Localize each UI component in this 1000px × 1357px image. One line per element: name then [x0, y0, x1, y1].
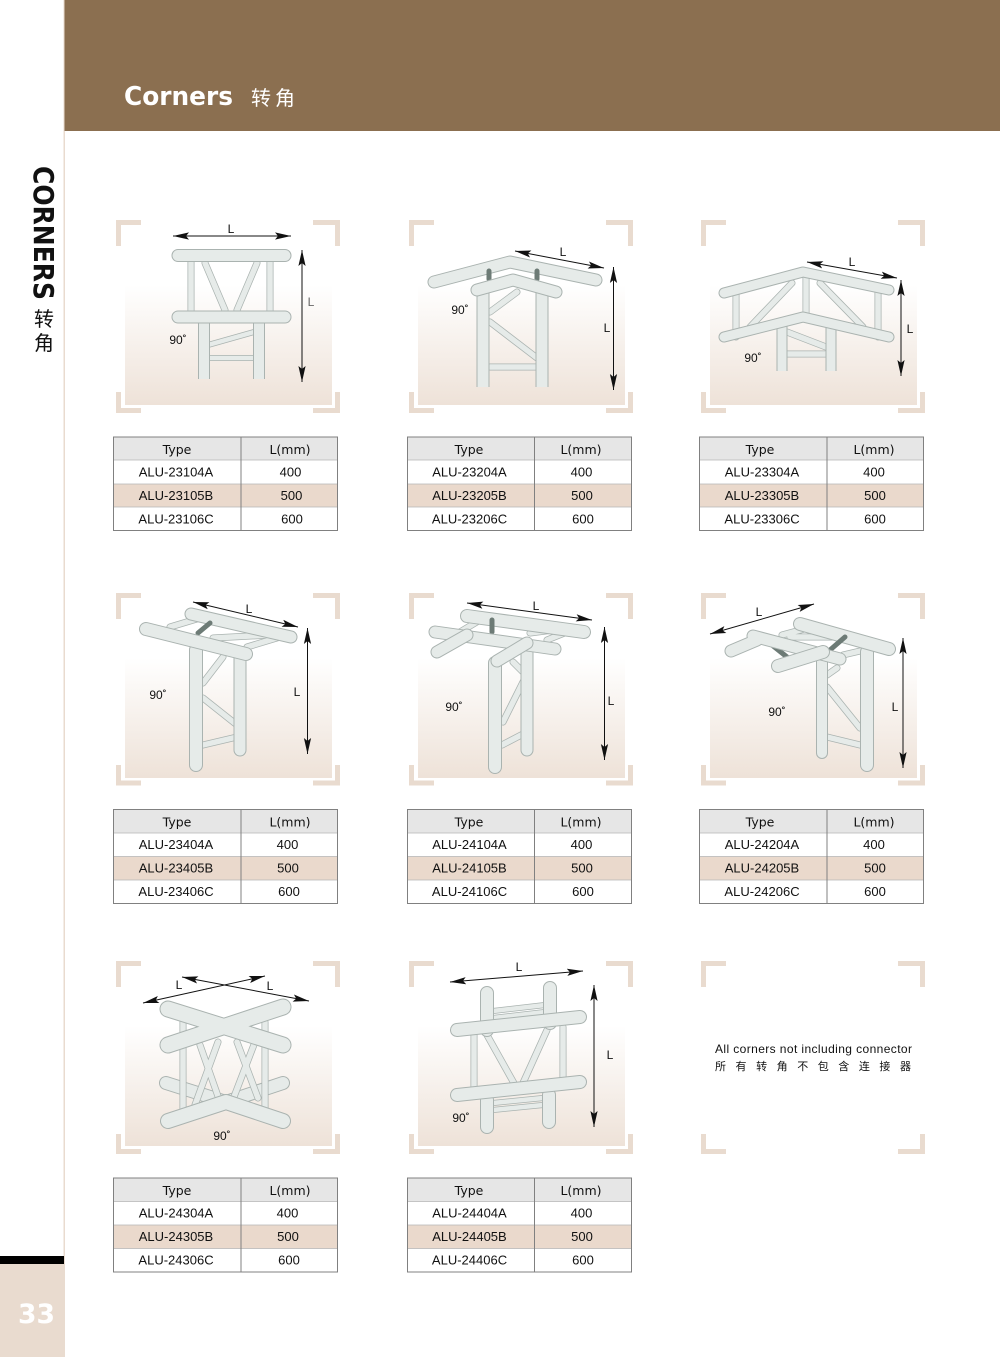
table: ALU-234: Type: [162, 814, 192, 830]
table: ALU-243: ALU-24305B: [139, 1229, 213, 1244]
dimension arrows: L: [608, 694, 615, 708]
dimension arrows: L: [849, 255, 856, 269]
dimension arrows: L: [533, 599, 540, 613]
table: ALU-241: 500: [571, 860, 593, 876]
table: ALU-234: ALU-23405B: [139, 860, 213, 876]
table: ALU-231: [114, 437, 338, 530]
dimension arrows: L: [308, 295, 315, 309]
truss drawing: [434, 262, 596, 387]
table: ALU-243: 500: [277, 1229, 299, 1244]
dimension arrows: 90˚: [149, 688, 167, 702]
table: ALU-242: ALU-24205B: [725, 860, 799, 876]
truss drawing: [178, 256, 285, 379]
dimension arrows: 90˚: [169, 333, 187, 347]
side title: 转: [34, 308, 54, 331]
left margin rule: [64, 0, 65, 1357]
table: ALU-231: L(mm): [269, 442, 311, 457]
truss drawing: [457, 988, 580, 1127]
dimension arrows: L: [246, 602, 253, 616]
truss drawing: [166, 1007, 283, 1121]
table: ALU-244: 400: [571, 1206, 592, 1220]
table: ALU-241: ALU-24105B: [432, 860, 507, 876]
title: 转角: [251, 87, 299, 110]
dimension arrows: L: [267, 979, 274, 993]
table: ALU-232: 600: [572, 512, 594, 526]
dimension arrows: [450, 960, 614, 1127]
dimension arrows: 90˚: [452, 1111, 470, 1125]
title: Corners: [124, 82, 233, 112]
table: ALU-231: 400: [280, 464, 301, 480]
table: ALU-242: ALU-24206C: [724, 884, 800, 899]
table: ALU-234: 500: [277, 860, 299, 876]
dimension arrows: [744, 255, 914, 376]
table: ALU-233: ALU-23305B: [725, 488, 799, 503]
panel: ALU-241 corner: [412, 596, 630, 783]
table: ALU-233: ALU-23304A: [725, 464, 800, 480]
dimension arrows: [169, 222, 315, 382]
table: ALU-242: Type: [745, 814, 775, 830]
dimension arrows: [451, 245, 614, 390]
table: ALU-241: 400: [571, 837, 592, 852]
table: ALU-244: L(mm): [560, 1183, 602, 1198]
table: ALU-233: 500: [864, 488, 886, 503]
table: ALU-232: ALU-23205B: [432, 488, 507, 503]
table: ALU-243: Type: [162, 1183, 192, 1198]
table: ALU-244: Type: [454, 1183, 484, 1198]
table: ALU-231: ALU-23105B: [139, 488, 213, 503]
table: ALU-233: L(mm): [853, 442, 895, 457]
dimension arrows: L: [756, 605, 763, 619]
page number block: 33: [18, 1299, 55, 1330]
table: ALU-243: 400: [277, 1206, 298, 1220]
table: ALU-242: [700, 810, 924, 904]
panel: ALU-244 corner: [412, 960, 630, 1152]
dimension arrows: 90˚: [451, 303, 469, 317]
truss drawing: [435, 616, 584, 767]
table: ALU-232: [408, 437, 632, 530]
note text: [715, 1042, 920, 1073]
table: ALU-241: ALU-24104A: [432, 837, 507, 852]
table: ALU-242: ALU-24204A: [725, 837, 800, 852]
dimension arrows: [149, 602, 308, 754]
table: ALU-231: 600: [281, 512, 303, 526]
table: ALU-233: [700, 437, 924, 530]
table: ALU-244: [408, 1178, 632, 1272]
dimension arrows: L: [560, 245, 567, 259]
truss drawing: [146, 614, 291, 765]
dimension arrows: 90˚: [445, 700, 463, 714]
table: ALU-231: ALU-23106C: [138, 512, 214, 526]
table: ALU-242: 600: [864, 884, 886, 899]
dimension arrows: L: [294, 685, 301, 699]
note text: All corners not including connector: [715, 1042, 912, 1056]
dimension arrows: [710, 604, 903, 768]
dimension arrows: L: [604, 321, 611, 335]
table: ALU-244: ALU-24404A: [432, 1206, 507, 1220]
table: ALU-232: ALU-23206C: [432, 512, 507, 526]
table: ALU-244: 500: [571, 1229, 593, 1244]
table: ALU-242: 500: [864, 860, 886, 876]
table: ALU-243: 600: [278, 1252, 300, 1268]
dimension arrows: 90˚: [768, 705, 786, 719]
table: ALU-233: 400: [863, 464, 885, 480]
table: ALU-242: L(mm): [853, 814, 895, 830]
table: ALU-233: Type: [745, 442, 775, 457]
title: [124, 82, 299, 112]
header band: [64, 0, 1000, 131]
dimension arrows: L: [907, 322, 914, 336]
panel: ALU-243 corner: [118, 964, 338, 1152]
table: ALU-232: ALU-23204A: [432, 464, 507, 480]
table: ALU-232: L(mm): [560, 442, 602, 457]
table: ALU-243: ALU-24304A: [139, 1206, 214, 1220]
dimension arrows: L: [892, 700, 899, 714]
table: ALU-244: ALU-24406C: [432, 1252, 507, 1268]
table: ALU-244: ALU-24405B: [432, 1229, 507, 1244]
page number block: [0, 1256, 65, 1357]
table: ALU-243: ALU-24306C: [138, 1252, 214, 1268]
dimension arrows: L: [607, 1048, 614, 1062]
panel: ALU-242 corner: [704, 596, 922, 783]
side title: CORNERS: [27, 166, 59, 300]
table: ALU-241: [408, 810, 632, 904]
panel: connector note: [704, 964, 922, 1152]
table: ALU-243: [114, 1178, 338, 1272]
table: ALU-234: [114, 810, 338, 904]
table: ALU-234: ALU-23404A: [139, 837, 214, 852]
table: ALU-241: L(mm): [560, 814, 602, 830]
dimension arrows: 90˚: [744, 351, 762, 365]
table: ALU-241: Type: [454, 814, 484, 830]
table: ALU-234: ALU-23406C: [138, 884, 214, 899]
dimension arrows: [143, 976, 309, 1143]
side title: 角: [34, 332, 54, 355]
table: ALU-234: 600: [278, 884, 300, 899]
table: ALU-233: 600: [864, 512, 886, 526]
table: ALU-241: 600: [572, 884, 594, 899]
table: ALU-234: L(mm): [269, 814, 311, 830]
table: ALU-232: 500: [571, 488, 593, 503]
table: ALU-231: Type: [162, 442, 192, 457]
table: ALU-232: 400: [571, 464, 592, 480]
table: ALU-234: 400: [277, 837, 298, 852]
table: ALU-232: Type: [454, 442, 484, 457]
dimension arrows: 90˚: [213, 1129, 231, 1143]
dimension arrows: L: [228, 222, 235, 236]
table: ALU-231: ALU-23104A: [139, 464, 214, 480]
panel: ALU-231 corner: [118, 222, 338, 410]
panel: ALU-234 corner: [118, 596, 338, 783]
panel: ALU-233 corner: [704, 222, 922, 410]
dimension arrows: L: [176, 978, 183, 992]
table: ALU-242: 400: [863, 837, 885, 852]
note text: 所有转角不包含连接器: [715, 1059, 920, 1073]
table: ALU-243: L(mm): [269, 1183, 311, 1198]
dimension arrows: [445, 599, 615, 760]
truss drawing: [724, 272, 889, 371]
table: ALU-231: 500: [281, 488, 302, 503]
table: ALU-244: 600: [572, 1252, 594, 1268]
table: ALU-233: ALU-23306C: [724, 512, 800, 526]
dimension arrows: L: [516, 960, 523, 974]
table: ALU-241: ALU-24106C: [432, 884, 507, 899]
panel: ALU-232 corner: [412, 222, 630, 410]
truss drawing: [731, 624, 889, 765]
